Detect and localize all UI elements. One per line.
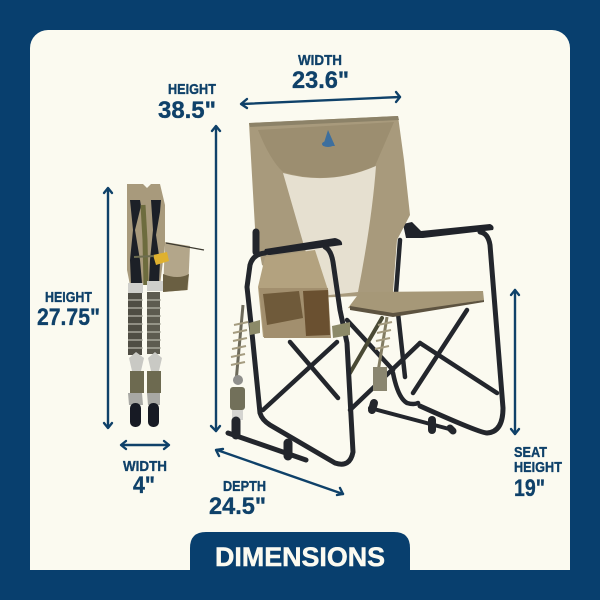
label: seat height: 19" <box>514 475 545 502</box>
arrow: chair width <box>241 92 400 108</box>
chair back fabric <box>249 116 410 298</box>
label: chair height: HEIGHT <box>168 81 216 98</box>
label: folded height: 27.75" <box>37 304 100 331</box>
near arm rest <box>264 238 342 255</box>
clamps <box>129 352 144 371</box>
label: depth <box>209 478 266 520</box>
left arm frame <box>247 232 353 464</box>
folded pocket <box>163 242 190 292</box>
hinge blocks <box>128 283 143 293</box>
heading tab: dimensions: DIMENSIONS <box>215 542 385 572</box>
label: chair height: 38.5" <box>158 97 216 124</box>
tag <box>153 252 169 265</box>
label: folded width: WIDTH <box>123 458 167 475</box>
back shading <box>249 116 399 127</box>
arrow: seat height <box>511 290 519 434</box>
side pocket <box>258 250 330 337</box>
rear frame and far legs <box>263 232 503 433</box>
folded legs <box>128 293 142 355</box>
mesh panel <box>283 166 376 296</box>
label: depth: 24.5" <box>209 493 266 520</box>
arrow: folded width <box>121 441 169 449</box>
label: folded width: 4" <box>133 472 155 499</box>
foam grips <box>130 371 144 393</box>
front rocker foot <box>228 403 453 460</box>
folded chair <box>127 184 204 427</box>
second stake <box>378 317 387 372</box>
foam grip <box>230 387 245 410</box>
folded fabric <box>127 184 165 285</box>
label: seat height <box>514 444 562 502</box>
label: chair height <box>158 81 216 124</box>
heading tab: dimensions <box>190 532 410 572</box>
logo <box>323 130 335 146</box>
arrow: depth <box>216 449 343 495</box>
arrow: folded height <box>104 188 112 428</box>
front cross braces <box>290 342 338 398</box>
label: top width: WIDTH <box>298 52 342 69</box>
open chair <box>228 116 503 464</box>
label: seat height: SEAT <box>514 444 547 461</box>
label: folded width <box>123 458 167 499</box>
label: top width: 23.6" <box>292 67 349 94</box>
seat <box>348 291 484 314</box>
rear rest <box>403 222 494 238</box>
footer band <box>0 570 600 600</box>
rear cross braces <box>413 310 467 393</box>
label: folded height: HEIGHT <box>45 289 92 306</box>
arrow: chair height <box>211 126 220 431</box>
strap <box>249 320 260 335</box>
label: top width <box>292 52 349 94</box>
bases <box>128 393 143 405</box>
spring stake <box>236 305 243 382</box>
rear foot <box>370 408 453 430</box>
label: seat height: HEIGHT <box>514 459 562 476</box>
label: folded height <box>37 289 100 331</box>
label: depth: DEPTH <box>223 478 266 495</box>
